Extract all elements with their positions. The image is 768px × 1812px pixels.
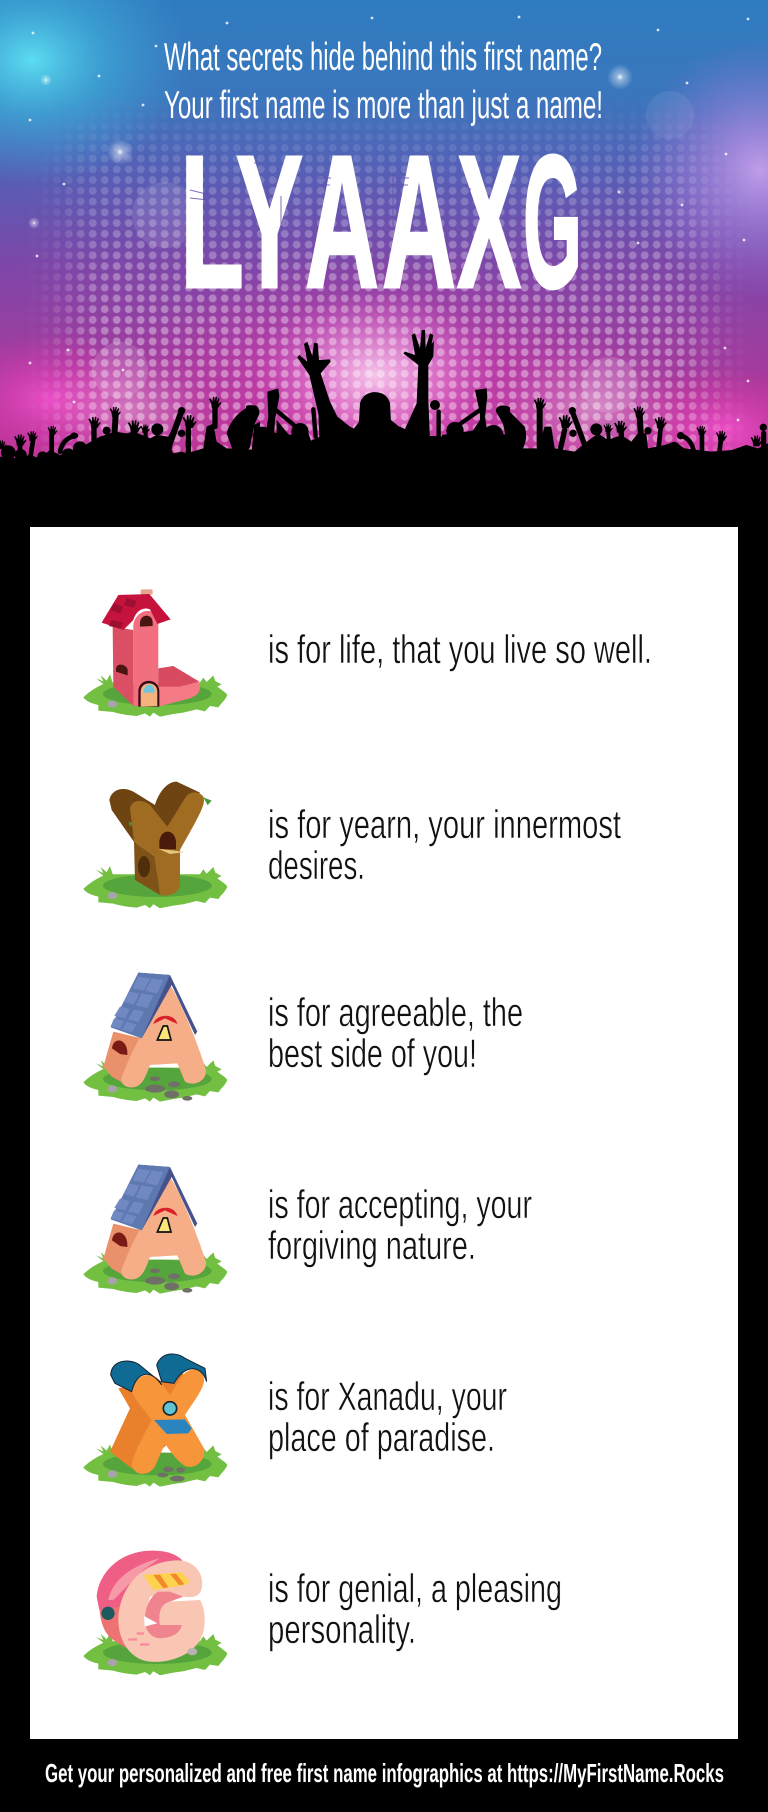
header background bbox=[0, 0, 768, 458]
title: name LYAAXG: Y bbox=[236, 117, 303, 328]
left crowd bbox=[0, 397, 260, 490]
icon: letter G house bbox=[83, 1551, 227, 1675]
title: name LYAAXG bbox=[180, 117, 582, 328]
icon: letter Y house bbox=[83, 782, 227, 908]
text: Y line: desires. bbox=[268, 844, 365, 888]
title: name LYAAXG: A bbox=[382, 117, 456, 328]
row: letter G bbox=[83, 1551, 562, 1675]
panel: white content card bbox=[30, 527, 738, 1739]
text: G line: is for genial, a pleasing bbox=[268, 1567, 562, 1611]
sparkle stars bbox=[28, 16, 749, 421]
row: letter A (accepting) bbox=[83, 1165, 532, 1294]
central figures bbox=[246, 330, 510, 467]
title: name LYAAXG: A bbox=[305, 117, 379, 328]
row: letter Y bbox=[83, 782, 621, 908]
text: A line: best side of you! bbox=[268, 1032, 477, 1076]
row: letter A (agreeable) bbox=[83, 973, 523, 1102]
text: A line 2: is for accepting, your bbox=[268, 1183, 532, 1227]
text: G line: personality. bbox=[268, 1608, 416, 1652]
text: Y line: is for yearn, your innermost bbox=[268, 803, 621, 847]
right crowd bbox=[508, 398, 768, 490]
row: letter L bbox=[83, 589, 652, 717]
title: name LYAAXG: L bbox=[180, 117, 244, 328]
text: A line 2 bbox=[268, 1183, 532, 1268]
text: X line bbox=[268, 1375, 507, 1460]
icon: letter A house bbox=[83, 973, 227, 1102]
icon: letter L house bbox=[83, 589, 227, 717]
heading: question lines bbox=[164, 36, 603, 127]
text: Y line bbox=[268, 803, 621, 888]
row: letter X bbox=[83, 1354, 507, 1487]
text: G line bbox=[268, 1567, 562, 1652]
text: A line: is for agreeable, the bbox=[268, 991, 523, 1035]
text: X line: is for Xanadu, your bbox=[268, 1375, 507, 1419]
icon: letter A house bbox=[83, 1165, 227, 1294]
text: G bbox=[523, 117, 582, 328]
text: A line 2: forgiving nature. bbox=[268, 1224, 476, 1268]
text: A line bbox=[268, 991, 523, 1076]
crowd silhouette bbox=[0, 330, 768, 527]
icon: letter X house bbox=[83, 1354, 227, 1487]
text: X line: place of paradise. bbox=[268, 1416, 495, 1460]
title: name LYAAXG: X bbox=[457, 117, 521, 328]
